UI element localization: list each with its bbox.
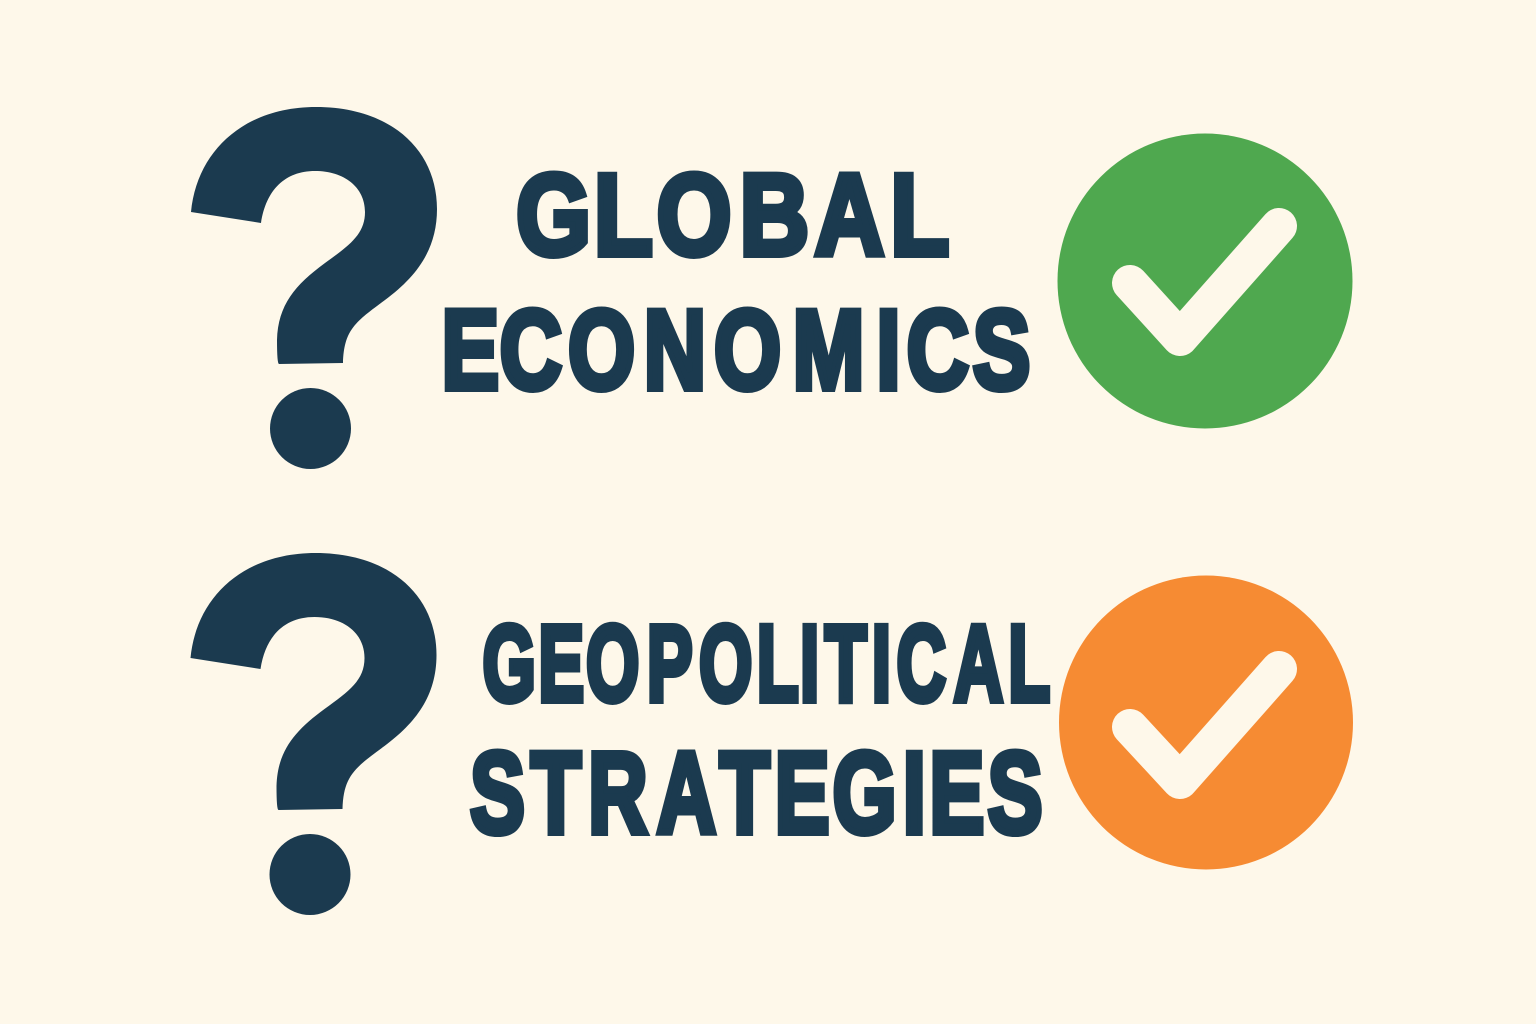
heading: geopolitical strategies: GEOPOLITICAL [483, 604, 1050, 724]
panel: geopolitical strategies row [190, 553, 1353, 915]
icon: question mark top [191, 107, 437, 469]
icon: green check badge [1058, 134, 1352, 428]
heading: geopolitical strategies: STRATEGIES [470, 730, 1043, 858]
heading: global economics [442, 151, 1030, 413]
panel: global economics row [191, 107, 1352, 469]
heading: global economics: GLOBAL [516, 151, 949, 279]
heading: global economics: ECONOMICS [442, 289, 1030, 413]
icon: question mark bottom [190, 553, 436, 915]
icon: orange check badge [1059, 576, 1353, 870]
heading: geopolitical strategies [470, 604, 1050, 858]
